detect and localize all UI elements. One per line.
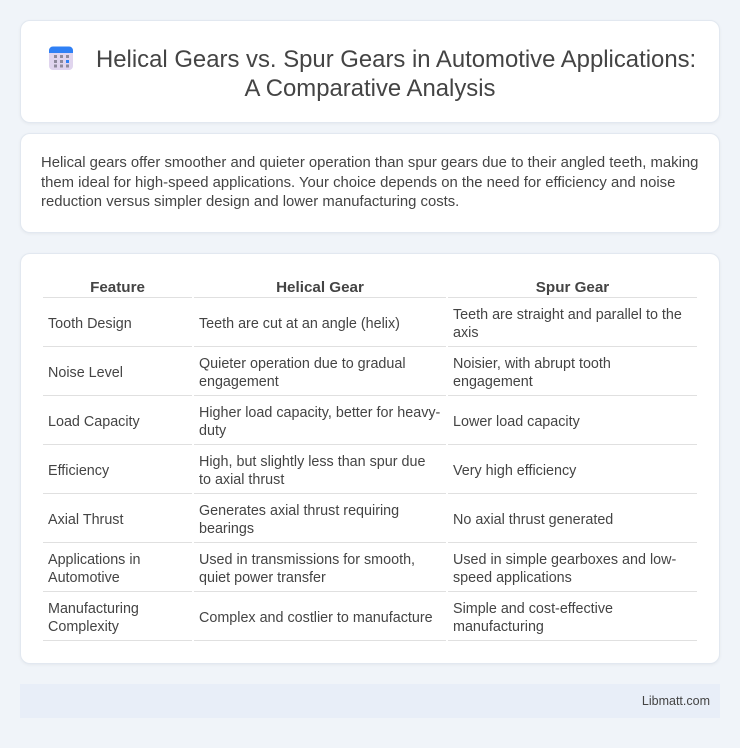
text: Complexity [48,619,119,635]
text: Helical Gear [276,279,364,296]
text: Applications in [48,552,140,568]
title card [20,20,720,123]
footer bar [20,684,720,718]
intro text [41,155,698,210]
text: manufacturing [453,619,544,635]
text: Quieter operation due to gradual [199,356,406,372]
text: Complex and costlier to manufacture [199,610,433,626]
text: Noise Level [48,365,123,381]
title text: A Comparative Analysis [245,75,495,102]
intro text: reduction versus simpler design and lower manufacturing costs. [41,194,459,210]
text: Feature [90,279,145,296]
text: Higher load capacity, better for heavy- [199,405,440,421]
text: Noisier, with abrupt tooth [453,356,611,372]
intro text: them ideal for high-speed applications. Your choice depends on the need for efficiency and noise [41,174,675,190]
intro card [20,133,720,233]
text: Efficiency [48,463,109,479]
text: engagement [199,374,279,390]
text: Used in simple gearboxes and low- [453,552,676,568]
footer text: Libmatt.com [642,694,710,708]
text: speed applications [453,570,572,586]
text: Teeth are straight and parallel to the [453,307,682,323]
row: axial thrust [48,503,613,537]
text: High, but slightly less than spur due [199,454,425,470]
text: engagement [453,374,533,390]
row: tooth design [48,307,682,341]
row: noise level [48,356,611,390]
text: Manufacturing [48,601,139,617]
text: Very high efficiency [453,463,576,479]
text: to axial thrust [199,472,284,488]
table card [20,253,720,664]
text: Tooth Design [48,316,132,332]
text: bearings [199,521,254,537]
row: manufacturing complexity [48,601,613,635]
title text [96,46,696,102]
column headers [90,279,609,296]
text: quiet power transfer [199,570,326,586]
icon: calendar [49,46,73,70]
text: axis [453,325,479,341]
text: Generates axial thrust requiring [199,503,399,519]
text: Lower load capacity [453,414,580,430]
text: No axial thrust generated [453,512,613,528]
text: Used in transmissions for smooth, [199,552,415,568]
text: Spur Gear [536,279,609,296]
text: Teeth are cut at an angle (helix) [199,316,400,332]
text: Load Capacity [48,414,140,430]
row: efficiency [48,454,576,488]
row: applications in automotive [48,552,676,586]
text: Axial Thrust [48,512,123,528]
text: Automotive [48,570,120,586]
text: Simple and cost-effective [453,601,613,617]
row: load capacity [48,405,580,439]
intro text: Helical gears offer smoother and quieter operation than spur gears due to their angled teeth, making [41,155,698,171]
title text: Helical Gears vs. Spur Gears in Automotive Applications: [96,46,696,73]
text: duty [199,423,226,439]
